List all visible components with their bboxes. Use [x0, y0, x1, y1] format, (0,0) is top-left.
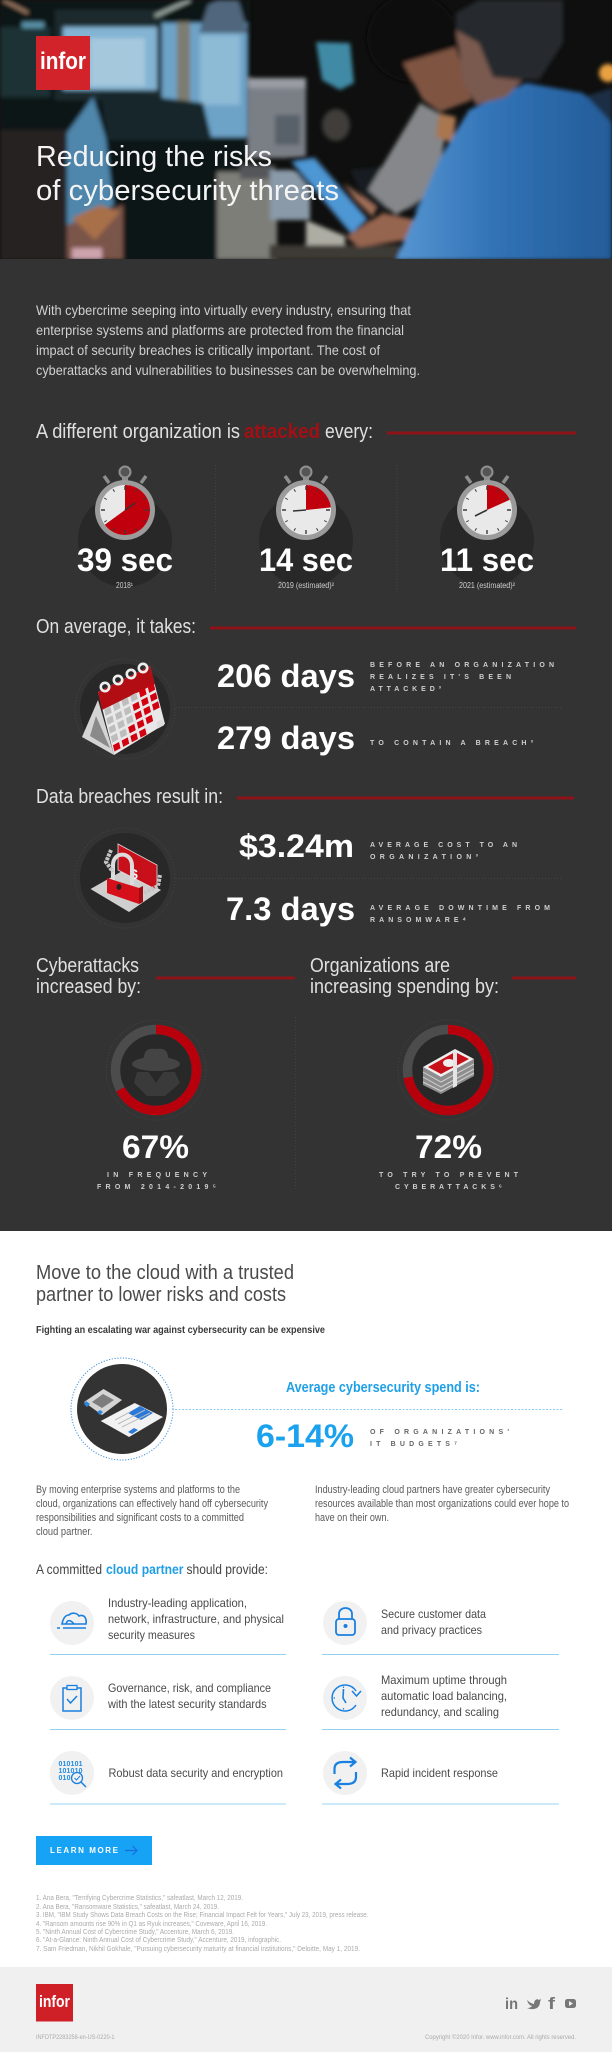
stat: 67 percent: 67% — [122, 1129, 189, 1165]
donut chart: 72 percent with money icon — [398, 1020, 498, 1120]
footnotes: 5. "Ninth Annual Cost of Cybercrime Study," Accenture, March 6, 2019. — [36, 1929, 234, 1936]
social icons: f — [548, 1994, 555, 2013]
stat: 67 percent — [97, 1129, 216, 1191]
donut chart: 67 percent with spy icon — [106, 1020, 206, 1120]
footnotes: 1. Ana Bera, "Terrifying Cybercrime Statistics," safeatlast, March 12, 2019. — [36, 1895, 243, 1902]
heading: move to the cloud: Move to the cloud with a trusted — [36, 1262, 294, 1284]
heading: organizations spending: increasing spending by: — [310, 976, 499, 998]
footer logo: infor — [39, 1992, 70, 2011]
item: maximum uptime: redundancy, and scaling — [381, 1705, 499, 1719]
item: maximum uptime: Maximum uptime through — [381, 1673, 507, 1687]
heading: cyberattacks increased: Cyberattacks — [36, 955, 139, 977]
heading: committed cloud partner: A committed — [36, 1562, 102, 1577]
stat: 7.3 days: RANSOMWARE⁴ — [370, 917, 467, 924]
text block: left body copy: cloud partner. — [36, 1526, 92, 1538]
title — [36, 141, 339, 207]
callout: average spend: OF ORGANIZATIONS' — [370, 1429, 509, 1436]
stat: 39 sec stopwatch: 39 sec — [77, 542, 173, 578]
item: incident response: Rapid incident response — [381, 1766, 498, 1780]
footer — [0, 1967, 612, 2052]
stat: 14 sec stopwatch: 2019 (estimated)² — [278, 581, 334, 590]
stat: 7.3 days — [226, 891, 550, 927]
stat: $3.24m: AVERAGE COST TO AN — [370, 842, 517, 849]
item: data security — [50, 1751, 283, 1795]
heading: cyberattacks increased — [36, 955, 295, 998]
item: secure customer data — [323, 1601, 486, 1645]
heading: data breaches — [36, 786, 574, 808]
stat: 72 percent: 72% — [415, 1129, 482, 1165]
footnotes: 3. IBM, "IBM Study Shows Data Breach Costs on the Rise; Financial Impact Felt for Years," July 23, 2019, press release. — [36, 1912, 369, 1919]
stat: 67 percent: IN FREQUENCY — [107, 1172, 207, 1179]
text block: left body copy: By moving enterprise systems and platforms to the — [36, 1484, 240, 1496]
item: governance: Governance, risk, and compliance — [108, 1681, 271, 1695]
stat: 7.3 days: 7.3 days — [226, 891, 355, 927]
item: secure customer data: Secure customer data — [381, 1607, 486, 1621]
stat: $3.24m: ORGANIZATION³ — [370, 854, 479, 861]
stat: 14 sec stopwatch — [259, 466, 353, 590]
stat: $3.24m: $3.24m — [239, 828, 354, 864]
heading: attacked every: attacked — [244, 421, 320, 443]
heading: move to the cloud: partner to lower risks and costs — [36, 1284, 286, 1306]
item: security measures — [50, 1596, 284, 1645]
item: maximum uptime: automatic load balancing, — [381, 1689, 507, 1703]
social icons: in — [505, 1996, 518, 2013]
text block: right body copy — [315, 1484, 569, 1524]
footnotes: 2. Ana Bera, "Ransomware Statistics," safeatlast, March 24, 2019. — [36, 1904, 219, 1911]
intro paragraph: impact of security breaches is critically important. The cost of — [36, 342, 380, 358]
intro paragraph: cyberattacks and vulnerabilities to businesses can be overwhelming. — [36, 362, 420, 378]
stat: 279 days: TO CONTAIN A BREACH³ — [370, 740, 534, 747]
item: governance: with the latest security standards — [107, 1697, 267, 1711]
copyright: Copyright ©2020 Infor. www.infor.com. All rights reserved. — [425, 2034, 576, 2041]
infor logo — [36, 36, 90, 90]
intro paragraph — [36, 302, 420, 378]
heading: committed cloud partner — [36, 1562, 268, 1577]
item: maximum uptime — [323, 1673, 507, 1720]
item: incident response — [323, 1751, 498, 1795]
button: learn more — [36, 1836, 152, 1865]
stat: 11 sec stopwatch — [440, 466, 534, 590]
heading: on average: On average, it takes: — [36, 616, 196, 638]
stat: 39 sec stopwatch — [77, 466, 173, 590]
stat: 39 sec stopwatch: 2018¹ — [116, 581, 133, 590]
icon: locked laptop — [75, 828, 175, 928]
stat: 14 sec stopwatch: 14 sec — [259, 542, 353, 578]
footnotes: 6. "At-a-Glance: Ninth Annual Cost of Cybercrime Study," Accenture, 2019, infographic. — [36, 1937, 281, 1944]
item: data security: 010101 — [58, 1761, 83, 1768]
stat: 67 percent: FROM 2014-2019⁵ — [97, 1184, 216, 1191]
heading: on average — [36, 616, 576, 638]
item: governance — [50, 1676, 271, 1720]
heading: attacked every — [36, 421, 576, 443]
document id: INFDTP2283258-en-US-0220-1 — [36, 2035, 115, 2041]
callout: average spend: 6-14% — [256, 1418, 354, 1454]
stat: 72 percent: CYBERATTACKS⁶ — [395, 1184, 502, 1191]
stat: 279 days: 279 days — [217, 720, 355, 756]
text block: right body copy: Industry-leading cloud partners have greater cybersecurity — [315, 1484, 550, 1496]
title: Reducing the risks — [36, 141, 272, 173]
heading: organizations spending — [310, 955, 576, 998]
footnotes — [36, 1895, 369, 1953]
page background: white section — [0, 1231, 612, 1967]
stat: $3.24m — [239, 828, 517, 864]
heading: committed cloud partner: cloud partner — [106, 1562, 184, 1577]
text block: right body copy: have on their own. — [315, 1512, 389, 1524]
heading: attacked every: A different organization is — [36, 421, 240, 443]
stat: 206 days: ATTACKED³ — [370, 686, 442, 693]
item: data security: Robust data security and encryption — [108, 1766, 283, 1780]
callout: average spend: Average cybersecurity spend is: — [286, 1379, 480, 1396]
icon: calendar — [75, 659, 175, 759]
stat: 206 days — [217, 658, 554, 694]
text block: left body copy — [36, 1484, 268, 1538]
stat: 206 days: REALIZES IT'S BEEN — [370, 674, 511, 681]
icon: calculator and invoice — [71, 1358, 173, 1460]
item: security measures: Industry-leading application, — [108, 1596, 247, 1610]
subheading: Fighting an escalating war against cybersecurity can be expensive — [36, 1324, 325, 1336]
callout: average spend — [256, 1379, 509, 1454]
stat: 72 percent: TO TRY TO PREVENT — [379, 1172, 519, 1179]
heading: move to the cloud — [36, 1262, 294, 1306]
icon: locked laptop: $ — [130, 866, 138, 882]
stat: 11 sec stopwatch: 11 sec — [440, 542, 534, 578]
hero photo: colleagues viewing tablet in dark office — [0, 0, 612, 260]
infor logo: infor — [40, 48, 86, 75]
item: data security: 101010 — [58, 1768, 83, 1775]
stat: 11 sec stopwatch: 2021 (estimated)² — [459, 581, 515, 590]
footer logo — [36, 1984, 73, 2022]
footnotes: 4. "Ransom amounts rise 90% in Q1 as Ryuk increases," Coveware, April 16, 2019. — [36, 1921, 267, 1928]
callout: average spend: IT BUDGETS⁷ — [370, 1441, 457, 1448]
stat: 279 days — [217, 720, 534, 756]
stat: 72 percent — [379, 1129, 519, 1191]
heading: committed cloud partner: should provide: — [186, 1562, 268, 1577]
item: secure customer data: and privacy practices — [381, 1623, 482, 1637]
text block: left body copy: cloud, organizations can effectively hand off cybersecurity — [36, 1498, 268, 1510]
item: data security: 010 — [58, 1775, 71, 1782]
heading: organizations spending: Organizations are — [310, 955, 450, 977]
stat: 7.3 days: AVERAGE DOWNTIME FROM — [370, 905, 550, 912]
page background: dark section — [0, 259, 612, 1231]
heading: data breaches: Data breaches result in: — [36, 786, 223, 808]
footnotes: 7. Sam Friedman, Nikhil Gokhale, "Pursuing cybersecurity maturity at financial institutions," Deloitte, May 1, 2019. — [36, 1946, 360, 1953]
text block: left body copy: responsibilities and significant costs to a committed — [36, 1512, 244, 1524]
item: security measures: security measures — [108, 1628, 195, 1642]
social icons — [505, 1994, 576, 2013]
title: of cybersecurity threats — [36, 175, 339, 207]
button: learn more: LEARN MORE — [50, 1846, 119, 1855]
heading: attacked every: every: — [325, 421, 373, 443]
intro paragraph: enterprise systems and platforms are protected from the financial — [36, 322, 404, 338]
item: security measures: network, infrastructure, and physical — [108, 1612, 284, 1626]
stat: 206 days: 206 days — [217, 658, 355, 694]
intro paragraph: With cybercrime seeping into virtually every industry, ensuring that — [36, 302, 411, 318]
heading: cyberattacks increased: increased by: — [36, 976, 141, 998]
stat: 206 days: BEFORE AN ORGANIZATION — [370, 662, 554, 669]
